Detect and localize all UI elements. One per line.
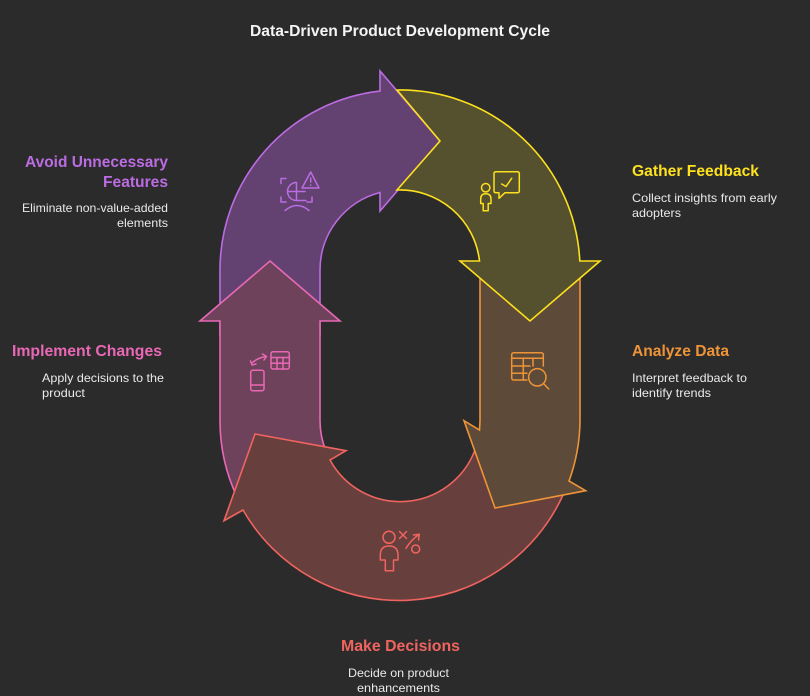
- icon: spreadsheet with magnifier: [512, 353, 549, 389]
- arrow: analyze data: [464, 270, 586, 508]
- arrow: implement changes: [200, 261, 340, 497]
- label: implement changes: Implement Changes: [12, 343, 162, 360]
- label: implement changes: Apply decisions to the: [42, 371, 164, 385]
- label: avoid unnecessary features: Avoid Unnecessary: [25, 154, 168, 171]
- arrow: avoid unnecessary features: [220, 71, 440, 335]
- label: analyze data: Interpret feedback to: [632, 371, 747, 385]
- title: Data-Driven Product Development Cycle: [250, 23, 550, 40]
- label: make decisions: enhancements: [357, 681, 440, 695]
- label: make decisions: [341, 638, 460, 695]
- label: avoid unnecessary features: Features: [103, 174, 168, 191]
- label: gather feedback: Collect insights from early: [632, 191, 777, 205]
- icon: person with check speech bubble: [481, 172, 519, 211]
- label: analyze data: identify trends: [632, 386, 711, 400]
- arrow: make decisions: [224, 434, 563, 600]
- icon: person with decision play: [380, 531, 420, 571]
- label: analyze data: Analyze Data: [632, 343, 729, 360]
- label: gather feedback: Gather Feedback: [632, 163, 759, 180]
- label: gather feedback: [632, 163, 777, 220]
- label: implement changes: product: [42, 386, 86, 400]
- label: avoid unnecessary features: [22, 154, 168, 230]
- label: gather feedback: adopters: [632, 206, 681, 220]
- label: analyze data: [632, 343, 747, 400]
- icon: target with warning triangle: [281, 172, 319, 210]
- label: make decisions: Make Decisions: [341, 638, 460, 655]
- icon: phone, arrows and table: [250, 352, 289, 391]
- arrow: gather feedback: [397, 90, 600, 321]
- label: avoid unnecessary features: elements: [117, 216, 168, 230]
- label: avoid unnecessary features: Eliminate non-value-added: [22, 201, 168, 215]
- label: implement changes: [12, 343, 164, 400]
- label: make decisions: Decide on product: [348, 666, 450, 680]
